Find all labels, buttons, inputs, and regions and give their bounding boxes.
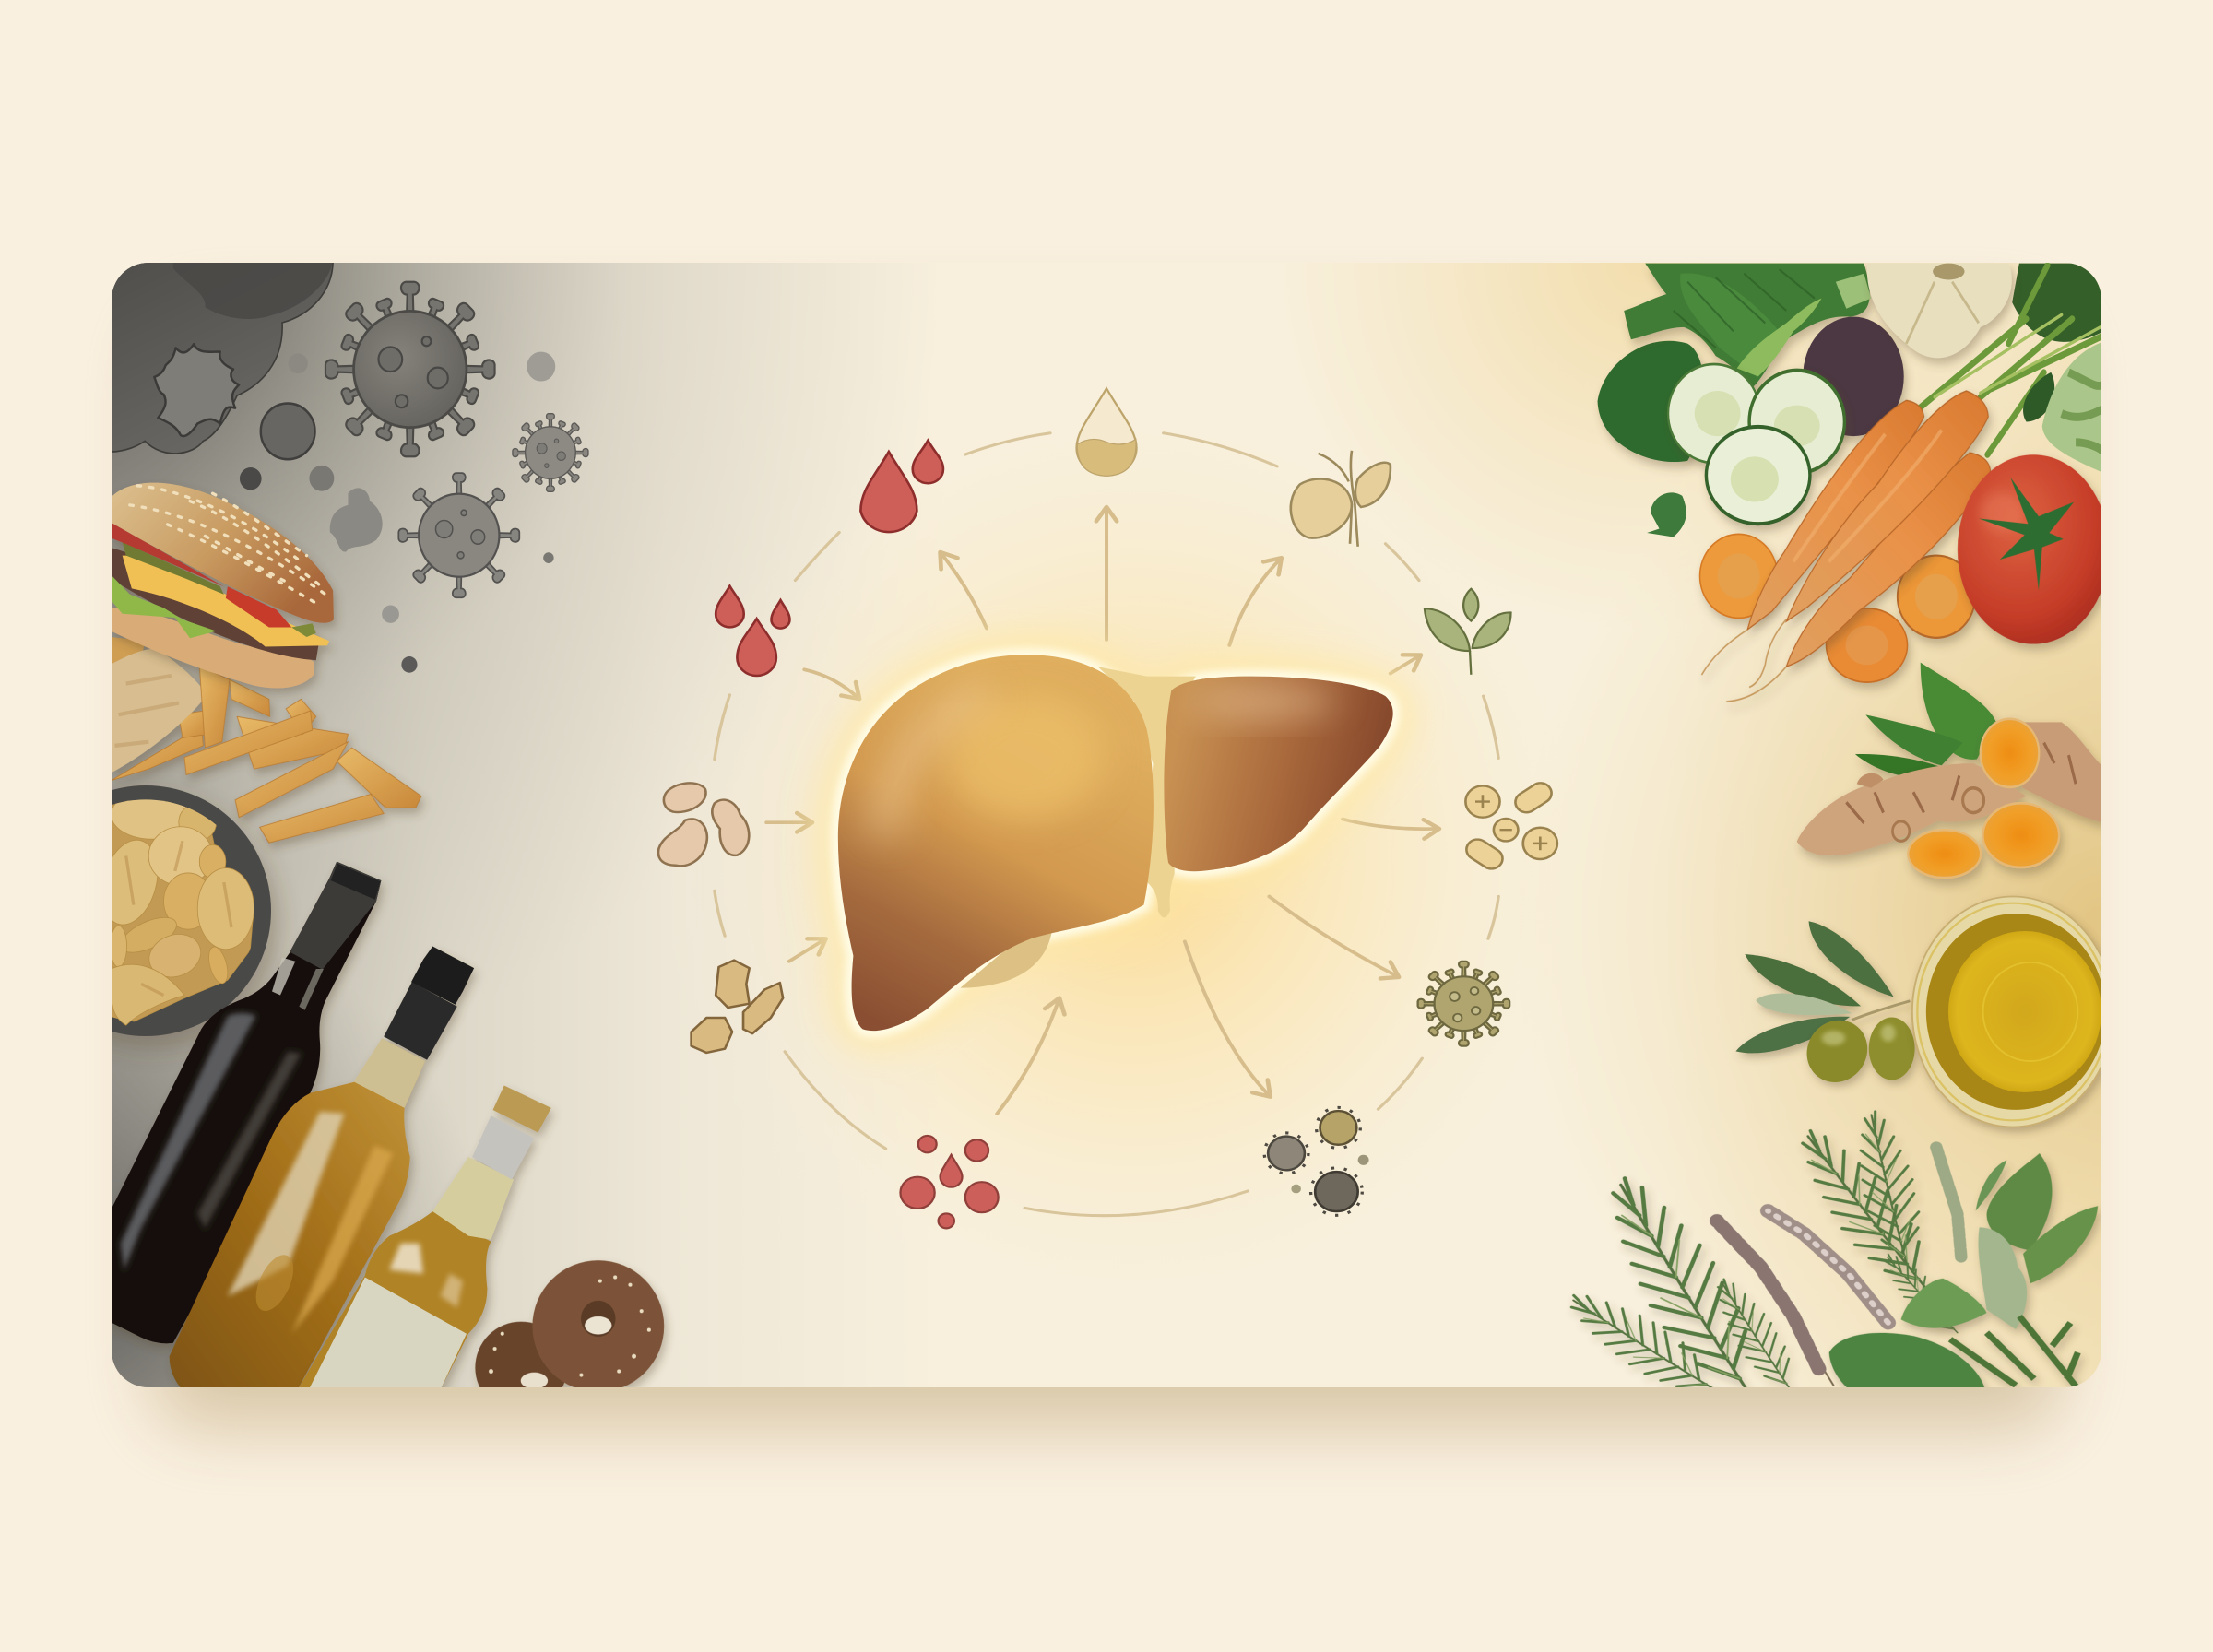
liver outline glow bbox=[838, 655, 1393, 1031]
cucumber slices bbox=[1668, 364, 1844, 524]
panel gradient base bbox=[112, 263, 2101, 1387]
turmeric leaves bbox=[1855, 663, 1996, 778]
icon: liver and bile ducts bbox=[1291, 451, 1391, 547]
panel drop shadow bbox=[152, 313, 2061, 1429]
donuts bbox=[475, 1260, 664, 1413]
floating particles bbox=[240, 352, 555, 673]
left lobe bbox=[1164, 677, 1393, 871]
right side: olive oil and herbs bbox=[1556, 896, 2113, 1408]
icon: pills bbox=[1462, 779, 1557, 873]
deformed germ in cloud bbox=[154, 344, 239, 436]
carrot slices bbox=[1700, 534, 1975, 682]
icon: three blood drops bbox=[716, 586, 789, 676]
dark plate bbox=[20, 785, 271, 1036]
main panel bbox=[20, 261, 2113, 1413]
amber bottle bbox=[170, 946, 474, 1390]
small leaf bbox=[1647, 492, 1686, 537]
right lobe bbox=[838, 655, 1154, 1031]
falciform connector bbox=[1098, 667, 1196, 917]
icon: oil drop bbox=[1077, 388, 1137, 476]
black wine bottle bbox=[111, 862, 381, 1343]
small virus bbox=[513, 414, 588, 491]
lavender sprigs bbox=[1717, 1145, 1961, 1386]
icon: germ cluster bbox=[1264, 1107, 1369, 1215]
left side: toxins cloud and viruses bbox=[107, 261, 588, 843]
greens stems top right bbox=[1921, 264, 2104, 454]
gallbladder bbox=[960, 930, 1052, 988]
liver outer golden glow bbox=[838, 655, 1393, 1031]
large virus bbox=[325, 282, 495, 456]
lettuce cluster bbox=[1624, 264, 1871, 389]
right lettuce texture bbox=[2062, 372, 2102, 451]
olive oil bowl bbox=[1912, 896, 2113, 1127]
golden vignette right bbox=[1602, 490, 2101, 1364]
infographic canvas bbox=[112, 263, 2101, 1464]
potato chips bbox=[93, 790, 254, 1025]
chips plate bbox=[20, 785, 271, 1036]
fries and chip bbox=[111, 637, 421, 843]
olives bbox=[1799, 1014, 1915, 1089]
icon: herb leaves bbox=[1425, 589, 1510, 675]
icon: fatty cells bbox=[692, 961, 783, 1053]
left lobe highlight bbox=[1189, 686, 1336, 717]
liver radial glow bbox=[860, 522, 1468, 1192]
turmeric roots bbox=[1797, 719, 2104, 878]
purple vegetable bbox=[1803, 317, 1904, 436]
ring segments bbox=[715, 433, 1498, 1216]
medium virus bbox=[398, 473, 519, 597]
golden vignette top bbox=[1345, 263, 1911, 559]
inner dark smoke bbox=[173, 261, 333, 319]
garlic bbox=[1867, 264, 2012, 358]
icon: two blood drops bbox=[860, 441, 943, 532]
spinach leaf bbox=[1598, 341, 1704, 462]
olive branch leaves bbox=[1735, 921, 1910, 1053]
carrots bbox=[1701, 391, 1990, 702]
bottles and donuts bbox=[111, 862, 664, 1413]
grey vignette bottom left bbox=[112, 1021, 441, 1387]
grey vignette top left bbox=[112, 263, 773, 773]
rosemary sprigs bbox=[1556, 1107, 1970, 1408]
sage leaves bbox=[1829, 1153, 2098, 1388]
right lobe highlights bbox=[884, 690, 1104, 837]
smoke cloud bbox=[107, 261, 333, 454]
right side: vegetables bbox=[1598, 264, 2109, 878]
icon: olive virus bbox=[1418, 962, 1509, 1046]
tomato bbox=[1958, 454, 2109, 644]
liver bbox=[838, 655, 1393, 1031]
burger bbox=[111, 483, 334, 688]
arrows bbox=[766, 507, 1439, 1114]
small clear bottle bbox=[297, 1085, 551, 1390]
icon: tan blobs bbox=[658, 783, 749, 866]
right lettuce bbox=[2042, 341, 2104, 473]
icon: red blood cells bbox=[900, 1136, 999, 1228]
central liver diagram bbox=[658, 388, 1557, 1228]
